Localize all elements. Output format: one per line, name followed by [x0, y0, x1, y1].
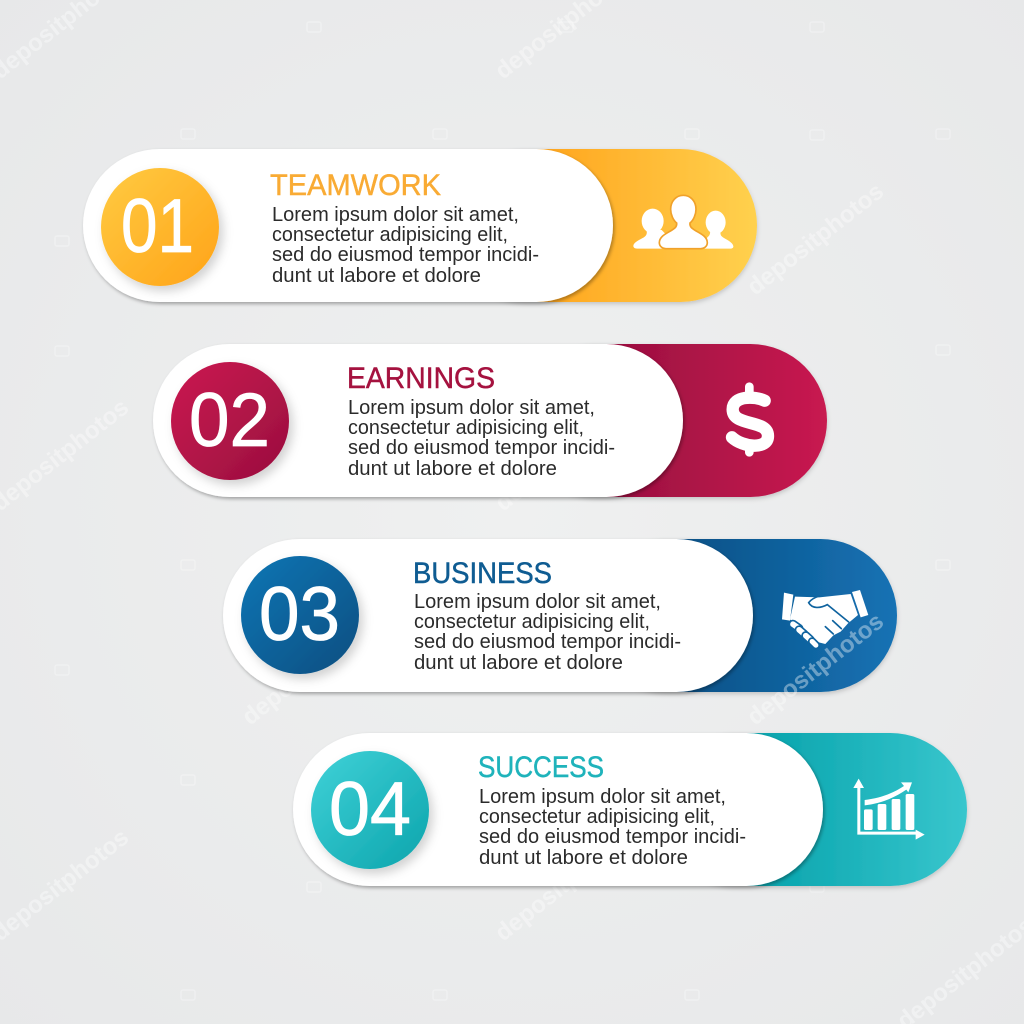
- row 4: success: [293, 733, 967, 886]
- body text 4: Lorem ipsum dolor sit amet,: [479, 785, 726, 808]
- number badge 1: 01: [121, 184, 194, 269]
- body text 2: [348, 396, 615, 480]
- coloured tab 3: [590, 539, 897, 692]
- watermark on tab: depositphotos: [742, 608, 889, 731]
- body text 1: dunt ut labore et dolore: [272, 264, 481, 287]
- number badge 4: [311, 751, 429, 869]
- icon: dollar: [732, 387, 768, 452]
- body text 3: sed do eiusmod tempor incidi-: [414, 630, 681, 653]
- white pill 3: [223, 539, 753, 692]
- body text 4: consectetur adipisicing elit,: [479, 805, 715, 828]
- heading: success: SUCCESS: [478, 751, 604, 784]
- body text 1: consectetur adipisicing elit,: [272, 223, 508, 246]
- body text 4: [479, 785, 746, 869]
- number badge 2: 02: [189, 378, 270, 463]
- body text 1: [272, 203, 539, 287]
- body text 3: dunt ut labore et dolore: [414, 651, 623, 674]
- number badge 4: 04: [329, 767, 411, 852]
- icon: growth chart: [853, 779, 925, 840]
- body text 3: Lorem ipsum dolor sit amet,: [414, 590, 661, 613]
- white pill 2: [153, 344, 683, 497]
- heading: teamwork: TEAMWORK: [270, 169, 441, 202]
- coloured tab 2: [520, 344, 827, 497]
- body text 1: sed do eiusmod tempor incidi-: [272, 243, 539, 266]
- background watermarks: depositphotos: [490, 824, 637, 947]
- body text 3: [414, 590, 681, 674]
- number badge 3: [241, 556, 359, 674]
- icon: handshake: [782, 590, 868, 650]
- heading: earnings: EARNINGS: [347, 362, 495, 395]
- row 3: business: [223, 539, 897, 731]
- white pill 4: [293, 733, 823, 886]
- body text 2: dunt ut labore et dolore: [348, 457, 557, 480]
- coloured tab 4: [660, 733, 967, 886]
- body text 4: sed do eiusmod tempor incidi-: [479, 825, 746, 848]
- icon: people: [633, 195, 733, 249]
- background watermarks: depositphotos: [742, 178, 889, 301]
- body text 2: consectetur adipisicing elit,: [348, 416, 584, 439]
- body text 2: Lorem ipsum dolor sit amet,: [348, 396, 595, 419]
- body text 4: dunt ut labore et dolore: [479, 846, 688, 869]
- heading: business: BUSINESS: [413, 557, 552, 590]
- coloured tab 1: [450, 149, 757, 302]
- number badge 1: [101, 168, 219, 286]
- row 1: teamwork: [83, 149, 757, 302]
- number badge 2: [171, 362, 289, 480]
- body text 1: Lorem ipsum dolor sit amet,: [272, 203, 519, 226]
- background watermarks: depositphotos: [237, 608, 384, 731]
- background watermarks: depositphotos: [490, 394, 637, 517]
- body text 3: consectetur adipisicing elit,: [414, 610, 650, 633]
- white pill 1: [83, 149, 613, 302]
- row 2: earnings: [153, 344, 827, 497]
- number badge 3: 03: [259, 572, 340, 657]
- body text 2: sed do eiusmod tempor incidi-: [348, 436, 615, 459]
